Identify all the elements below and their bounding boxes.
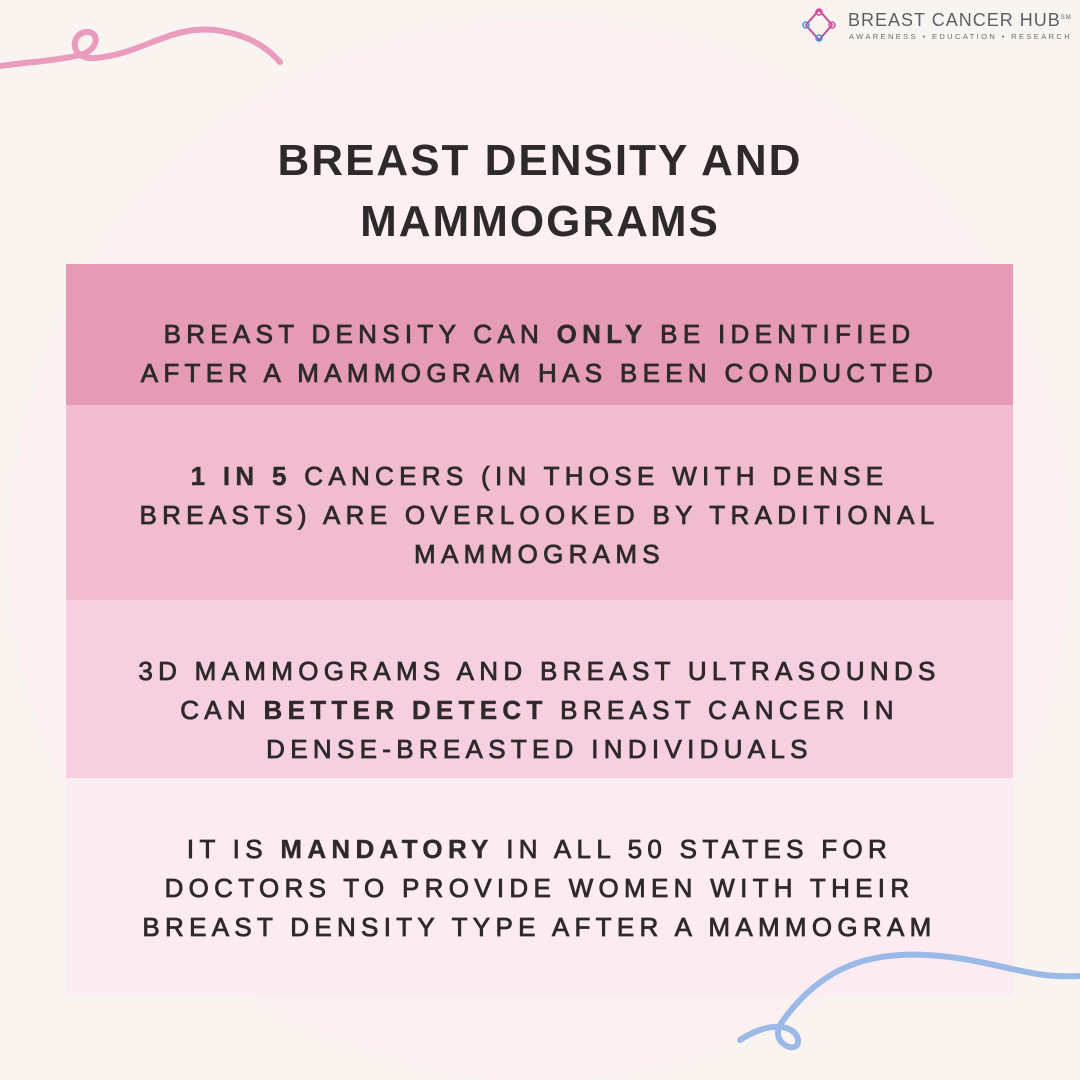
- panel: row 2: 1 IN 5 CANCERS (IN THOSE WITH DENSE: [191, 461, 888, 491]
- icon: logo knot: [802, 8, 836, 42]
- panel: row 2: [66, 405, 1013, 600]
- logo: [802, 8, 1072, 42]
- panel: row 2: MAMMOGRAMS: [414, 539, 665, 569]
- panel: row 3: DENSE-BREASTED INDIVIDUALS: [266, 734, 813, 764]
- panel: row 3: CAN BETTER DETECT BREAST CANCER IN: [180, 694, 899, 724]
- panel: row 4: DOCTORS TO PROVIDE WOMEN WITH THEIR: [165, 873, 914, 903]
- panel: row 3: [66, 600, 1013, 778]
- panel: row 4: BREAST DENSITY TYPE AFTER A MAMMOGRAM: [142, 912, 937, 942]
- panel: row 4: IT IS MANDATORY IN ALL 50 STATES FOR: [187, 834, 892, 864]
- decorative squiggle: pink: [0, 26, 283, 69]
- panel: row 1: BREAST DENSITY CAN ONLY BE IDENTIFIED: [164, 318, 915, 348]
- panel: row 3: 3D MAMMOGRAMS AND BREAST ULTRASOUNDS: [138, 656, 941, 686]
- panel: row 4: [66, 778, 1013, 995]
- title: [278, 136, 802, 246]
- logo: BREAST CANCER HUBSM: [848, 10, 1072, 30]
- logo: AWARENESS • EDUCATION • RESEARCH: [849, 32, 1072, 41]
- title: MAMMOGRAMS: [360, 197, 720, 246]
- panel: row 1: [66, 264, 1013, 405]
- decorative squiggle: blue: [737, 952, 1080, 1050]
- panel: row 1: AFTER A MAMMOGRAM HAS BEEN CONDUCTED: [141, 358, 938, 388]
- title: BREAST DENSITY AND: [278, 136, 802, 185]
- panel: row 2: BREASTS) ARE OVERLOOKED BY TRADITIONAL: [139, 500, 940, 530]
